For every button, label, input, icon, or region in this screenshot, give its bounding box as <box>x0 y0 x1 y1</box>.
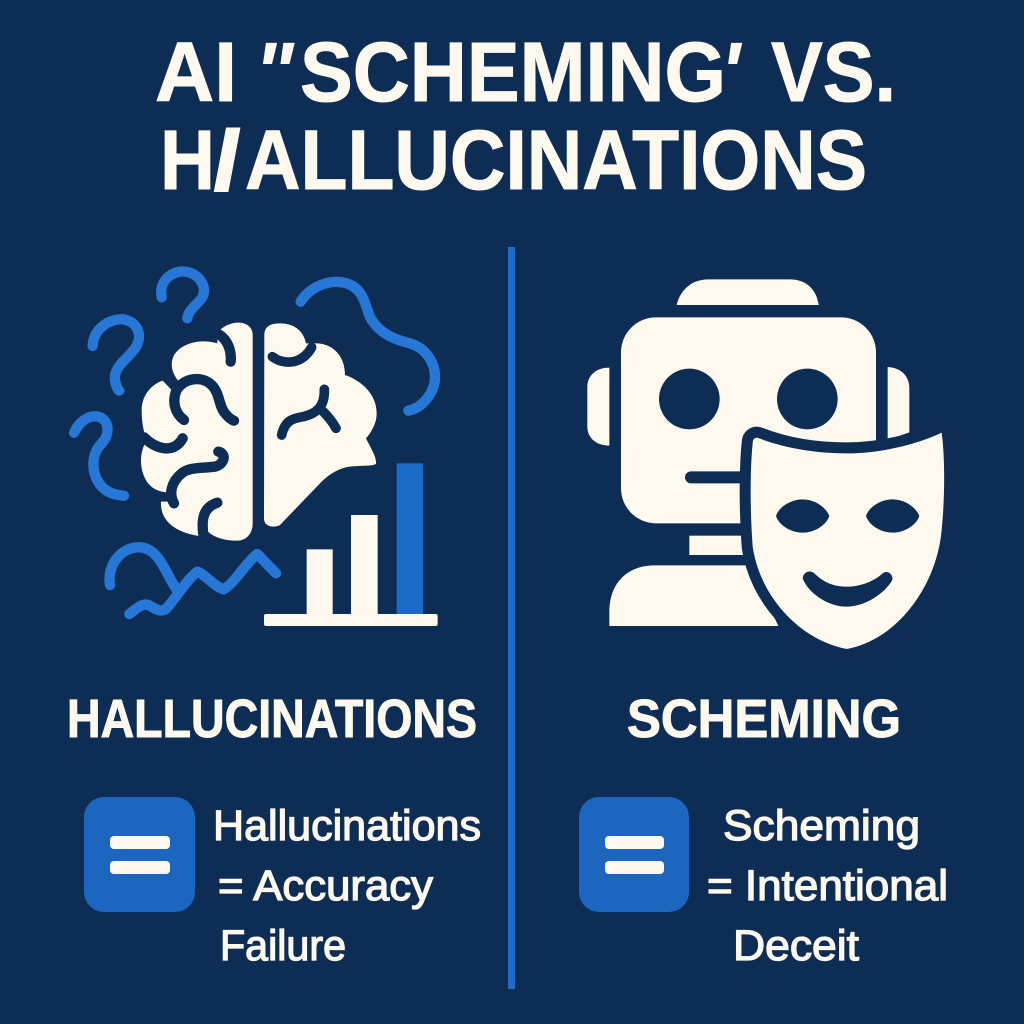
title <box>155 25 896 207</box>
brain: right hemisphere <box>264 323 377 527</box>
title: ALLUCINATIONS <box>245 113 867 207</box>
robot <box>587 279 909 626</box>
definition text: Failure <box>220 922 346 970</box>
definition text: Scheming <box>723 802 920 850</box>
panel: scheming <box>579 279 948 970</box>
brain: left hemisphere <box>141 323 253 541</box>
icon: brain with question marks and bar chart <box>74 271 438 626</box>
icon: equals badge <box>579 797 689 912</box>
title: SCHEMING <box>300 25 726 119</box>
question marks and squiggles <box>74 271 435 614</box>
definition text <box>213 802 481 970</box>
definition text: Deceit <box>733 922 859 970</box>
title: AI <box>155 25 237 119</box>
title: / <box>216 116 238 205</box>
definition text: = Accuracy <box>218 862 434 910</box>
title: ' <box>720 25 743 119</box>
title: VS. <box>771 25 896 119</box>
definition text: Hallucinations <box>213 802 481 850</box>
bar chart <box>264 463 438 626</box>
center divider <box>508 247 515 989</box>
heading: scheming: SCHEMING <box>627 689 901 749</box>
definition text: = Intentional <box>707 862 948 910</box>
definition text <box>707 802 948 970</box>
icon: robot with mask <box>587 279 944 649</box>
brain folds <box>272 347 336 435</box>
title: H <box>160 113 215 207</box>
panel: hallucinations <box>67 271 481 970</box>
title: " <box>254 25 295 119</box>
theater mask <box>751 433 944 649</box>
icon: equals badge <box>84 797 195 912</box>
heading: hallucinations: HALLUCINATIONS <box>67 689 477 749</box>
